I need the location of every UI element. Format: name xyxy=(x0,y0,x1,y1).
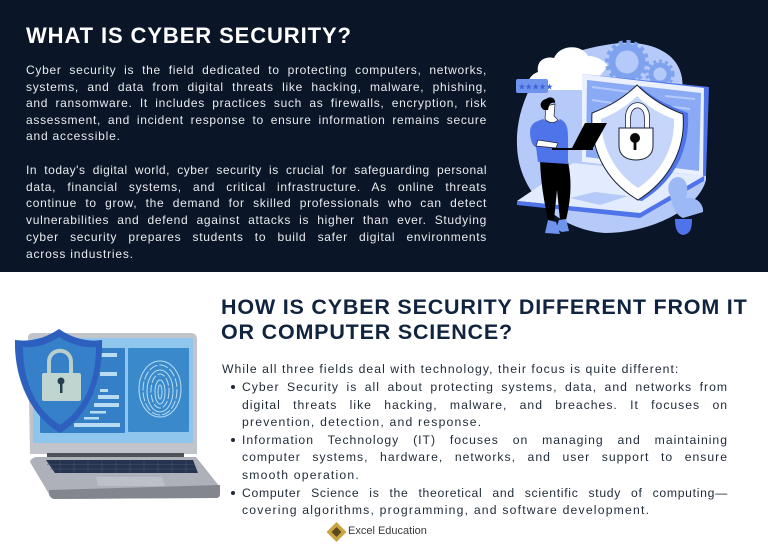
text block: definition paragraph xyxy=(26,63,487,143)
heading: difference from IT or computer science xyxy=(221,295,748,344)
text block: importance paragraph: continue to grow, the demand for skilled professionals who can detect xyxy=(26,196,487,210)
rating bubble: ★★★★★ xyxy=(518,82,554,92)
laptop base xyxy=(30,457,220,499)
bullet: cyber security: prevention, detection, and response. xyxy=(242,415,482,429)
illustration: laptop with shield, padlock and fingerprint xyxy=(14,329,220,499)
laptop lid xyxy=(28,333,197,454)
text block: importance paragraph: data, financial systems, and critical infrastructure. As online threats xyxy=(26,180,487,194)
padlock xyxy=(619,105,653,160)
text block: importance paragraph: across industries. xyxy=(26,246,134,260)
icon: gold diamond xyxy=(326,522,346,542)
text block: definition paragraph: and ransomware. It includes practices such as firewalls, encryption, risk xyxy=(26,96,487,110)
bullet list: three fields xyxy=(231,380,728,517)
plant xyxy=(668,177,703,235)
bullet: computer science: covering algorithms, programming, and software development. xyxy=(242,503,650,517)
illustration: person with laptop and security shield xyxy=(516,40,709,235)
padlock xyxy=(42,351,81,401)
bullet: computer science xyxy=(231,486,728,517)
laptop base xyxy=(517,163,704,213)
panel: what is cyber security xyxy=(0,0,768,272)
laptop screen xyxy=(582,74,709,176)
heading: what is cyber security: WHAT IS CYBER SECURITY? xyxy=(26,23,352,48)
bullet: information technology xyxy=(231,433,728,482)
wordmark: Excel Education xyxy=(348,525,427,537)
bullet: information technology: computer systems, hardware, networks, and user support to ensure xyxy=(242,450,728,464)
logo: Excel Education xyxy=(326,522,427,542)
text block: importance paragraph: cyber security prepares students to build safer digital environments xyxy=(26,230,487,244)
shield xyxy=(592,85,688,201)
heading: difference from IT or computer science: OR COMPUTER SCIENCE? xyxy=(221,320,513,344)
text block: importance paragraph: In today's digital world, cyber security is crucial for safeguarding personal xyxy=(26,163,487,177)
text block: intro sentence: While all three fields deal with technology, their focus is quite different: xyxy=(222,362,679,376)
fingerprint panel xyxy=(128,348,189,432)
person xyxy=(530,97,607,234)
bullet: cyber security: digital threats like hacking, malware, and breaches. It focuses on xyxy=(242,398,728,412)
text block: definition paragraph: and accessible. xyxy=(26,129,121,143)
bullet: cyber security: Cyber Security is all about protecting systems, data, and networks from xyxy=(242,380,728,394)
text block: definition paragraph: assessment, and incident response to ensure information remains secure xyxy=(26,113,487,127)
keyboard xyxy=(46,460,198,473)
text block: importance paragraph: vulnerabilities and defend against attacks is higher than ever. Studying xyxy=(26,213,487,227)
bullet: information technology: Information Technology (IT) focuses on managing and maintaining xyxy=(242,433,728,447)
text block: definition paragraph: Cyber security is the field dedicated to protecting computers, networks, xyxy=(26,63,487,77)
bullet: computer science: Computer Science is the theoretical and scientific study of computing— xyxy=(242,486,728,500)
shield xyxy=(15,329,102,433)
text block: importance paragraph xyxy=(26,163,487,260)
gears xyxy=(607,42,673,87)
background blob xyxy=(517,43,706,233)
bullet: information technology: smooth operation. xyxy=(242,468,360,482)
rating bubble xyxy=(516,79,554,93)
bullet: cyber security xyxy=(231,380,728,429)
cloud xyxy=(528,47,608,90)
text block: definition paragraph: systems, and data from digital threats like hacking, malware, phishing, xyxy=(26,80,487,94)
heading: difference from IT or computer science: HOW IS CYBER SECURITY DIFFERENT FROM IT xyxy=(221,295,748,319)
